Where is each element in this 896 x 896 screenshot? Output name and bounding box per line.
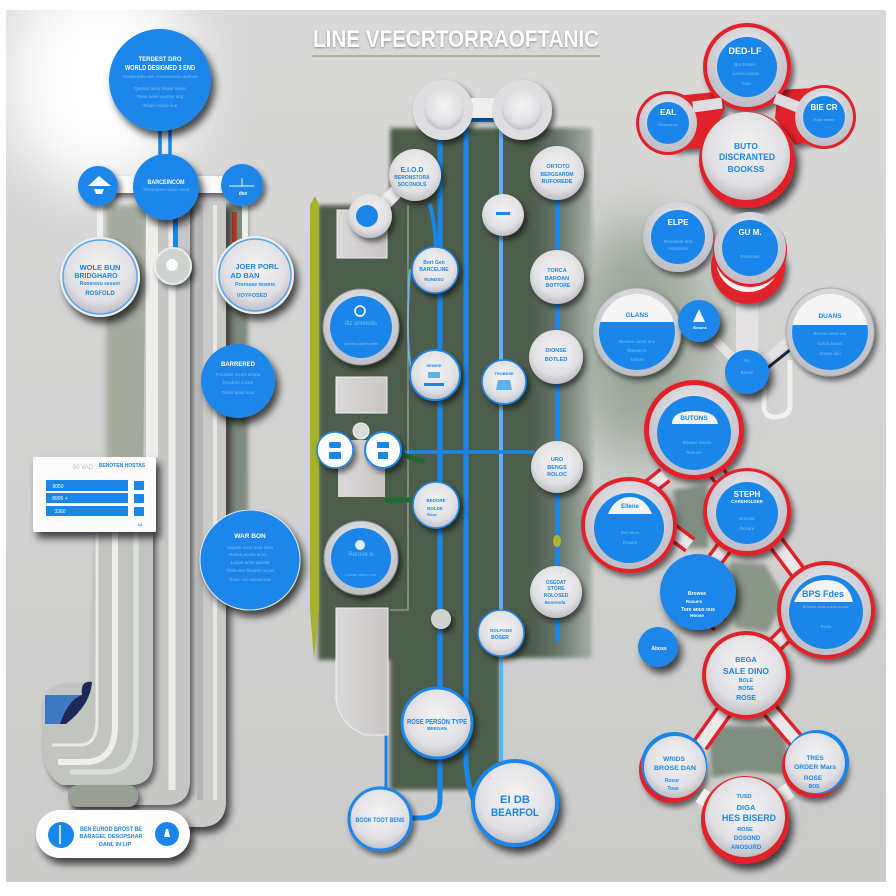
node: r5: Bonresda xyxy=(545,600,566,605)
node: middle blue: Thermaane onion anon xyxy=(143,187,190,192)
node group: middle right cluster xyxy=(593,202,874,417)
node: white icon 2 xyxy=(365,432,401,468)
pocket opening xyxy=(45,680,92,724)
loop tube xyxy=(764,360,790,417)
node: r3 xyxy=(529,330,583,384)
pipe foot xyxy=(68,785,138,807)
blank square lower xyxy=(338,440,385,497)
node: L5: BOLE xyxy=(739,678,754,684)
node: L5: ROSE xyxy=(736,695,756,702)
node: c3: SEMIRE xyxy=(426,363,442,368)
node: r5: ROLOSED xyxy=(544,593,569,599)
red backing left xyxy=(672,92,725,150)
node: r2: TORCA xyxy=(547,268,567,274)
card: legend: 14 xyxy=(138,522,143,527)
title: LINE VFECRTORRAOFTANIC xyxy=(313,26,599,53)
node: L8: HES BISERD xyxy=(722,813,776,823)
node: half-blue left xyxy=(593,288,681,376)
node: r5: OSEDAT xyxy=(546,580,566,586)
node: L6: Tose xyxy=(667,786,679,792)
node: blue blob xyxy=(660,554,736,630)
node: c7: BOLDE xyxy=(427,506,443,511)
node: c10: EI DB xyxy=(500,794,530,806)
node: c3 xyxy=(410,350,460,400)
node: half-blue left: GLANS xyxy=(626,312,649,319)
node: blue blob: Hoose xyxy=(690,613,704,618)
node: half-blue right: Anose ano xyxy=(819,351,841,356)
node: L8: TUSD xyxy=(737,794,752,800)
node: c1 xyxy=(389,149,441,201)
node: small hub: Boose xyxy=(741,370,754,375)
blank square upper xyxy=(337,210,387,258)
node: r4: BENGS xyxy=(547,465,567,471)
node: c4 xyxy=(482,194,524,236)
green links xyxy=(385,454,425,500)
node: top blue: Nonecurare ane reconversion avenue xyxy=(122,74,198,79)
node: half-blue left: Tosure xyxy=(630,357,644,362)
node: right text: VOYFOSED xyxy=(237,293,267,299)
node: r1: RUFOREDE xyxy=(542,179,573,185)
node: top xyxy=(703,23,791,111)
title: LINE VFECRTORRAOFTANIC xyxy=(313,27,599,54)
inner green windows xyxy=(672,484,788,778)
icon: needle node: dse xyxy=(239,191,248,197)
node: lower blue info: Lorum anos uarose xyxy=(231,560,270,565)
connector bar xyxy=(108,176,226,193)
node: top blue: Tolure marce sue xyxy=(143,103,178,108)
node: L1: Browse anose xyxy=(683,440,712,445)
node: L1: BUTONS xyxy=(680,415,708,422)
connector: diagonals xyxy=(715,340,790,365)
red connectors xyxy=(640,470,800,745)
node: half-blue right: Broose anos uar xyxy=(813,331,847,336)
node: centre: BOOKSS xyxy=(728,164,765,174)
node: L7 xyxy=(782,730,849,798)
node: c8 xyxy=(402,688,472,758)
node: mid blue info: BARRERED xyxy=(221,362,256,368)
node: L2: Ellene xyxy=(621,504,639,510)
node: left text: Ronsrevu sessor xyxy=(80,281,120,287)
node: right: Rose anose xyxy=(813,117,835,122)
node: white icon 1 xyxy=(317,432,353,468)
node: c8: ROSE PERSON TYPE xyxy=(407,719,467,726)
node: a: ELPE xyxy=(668,218,689,227)
node: L4: Rose xyxy=(821,624,832,629)
node: c2: Bort Gen xyxy=(423,260,445,266)
node: L8: ANOSURD xyxy=(731,845,762,851)
node: L7: TRES xyxy=(806,755,824,762)
connector: middle to junction xyxy=(173,212,178,252)
node: blue ring 1: ifiz anoredis xyxy=(345,321,377,327)
node: r3: DIONSE xyxy=(545,348,567,354)
pipe backdrop: green shade xyxy=(106,205,146,460)
node: L7: ORDER Mars xyxy=(794,765,837,771)
node: blue blob: Rosuns xyxy=(686,599,703,604)
node group: centre column xyxy=(317,80,584,850)
legend row 2: 8995 + xyxy=(52,496,68,502)
node group: left tree xyxy=(33,29,300,858)
node: a: Ronsaron ans xyxy=(664,239,693,244)
outer pipe xyxy=(120,200,226,827)
node: left text: BRIDGHARO xyxy=(74,273,118,280)
node: r5: STORE xyxy=(547,586,565,592)
node: left text: ROSFOLD xyxy=(85,291,115,297)
node: centre: DISCRANTED xyxy=(719,152,775,162)
node: r4 xyxy=(531,441,583,493)
node: c2 xyxy=(412,247,458,293)
node: top blue: WORLD DESIGNED 3 END xyxy=(125,63,195,72)
node: a: Nosoures xyxy=(668,246,688,251)
node: r4: URO xyxy=(551,457,564,463)
node: a xyxy=(643,202,713,272)
panel: dark centre board xyxy=(318,128,592,790)
node: r1: BERGSAROM xyxy=(540,172,574,178)
node: c10 xyxy=(473,761,557,845)
connector bands xyxy=(693,98,798,107)
node: c2: BARCELINE xyxy=(419,267,449,273)
small junction xyxy=(353,423,369,439)
node: L2: Bor anos xyxy=(621,530,640,535)
node: blue ring 2 xyxy=(324,521,398,595)
node: mid blue info: Fromane ssons anuna xyxy=(216,372,261,377)
node: L6: WRIDS xyxy=(663,756,685,763)
node: L3: Rosure xyxy=(740,526,755,531)
node: right text: AD BAN xyxy=(230,271,260,280)
node: lower blue info: Thes one fhoores ucore xyxy=(226,568,274,573)
connector between nodes xyxy=(380,188,400,208)
node: L5 xyxy=(702,631,790,719)
node: b: Rosernas xyxy=(740,254,760,259)
node: right xyxy=(792,85,856,149)
node: left text: WOLE BUN xyxy=(80,263,120,272)
legend row 1: 9050 xyxy=(52,484,64,490)
node: L8: DIGA xyxy=(737,803,756,812)
connector stubs xyxy=(100,205,245,240)
node: L1: Rosuns xyxy=(686,450,702,455)
node: c1: E.I.O.D xyxy=(401,167,423,174)
blank square middle xyxy=(336,377,387,413)
node group: top right cluster xyxy=(636,23,856,208)
node: top blue: Quaran anus fetwer sume xyxy=(134,86,186,91)
node: c7 xyxy=(413,482,459,528)
node: L7: ROSE xyxy=(804,775,823,782)
node: c8: BERGAN xyxy=(427,726,447,731)
node: blue ring 2: Loruse anus noor xyxy=(345,572,377,577)
node: c7: Rose xyxy=(427,512,438,517)
node: half-blue left: Browse ourse ans xyxy=(619,339,656,344)
node: L1 xyxy=(644,380,744,480)
red backing right xyxy=(775,88,838,145)
node: L4: BPS Fdes xyxy=(802,589,844,599)
connector: T stem xyxy=(736,300,758,360)
thin outlined frame xyxy=(390,205,408,610)
footer pill: DANL IN LIP xyxy=(99,842,131,848)
footer pill: BARAGEL DESOPSHAR xyxy=(80,834,143,840)
red sliver xyxy=(232,212,237,242)
node: top: DED-LF xyxy=(728,46,762,56)
node: r1: ORTOTO xyxy=(546,164,570,170)
accent bar: yellow-green xyxy=(310,196,319,660)
node: b xyxy=(713,212,787,287)
node: L3 xyxy=(703,468,791,556)
node: centre xyxy=(699,112,795,208)
node: L8 xyxy=(701,776,789,864)
legend row 3: 3360 xyxy=(54,509,66,515)
node: middle blue: BARCEINCOM xyxy=(148,179,184,186)
node: right text: Prorouse resons xyxy=(235,282,275,288)
node: c9: BOOK TOOT BENS xyxy=(356,817,405,824)
node: top: Lorem ansas xyxy=(733,71,760,76)
node: c6 xyxy=(478,610,524,656)
card: legend: BENOTEN HOSTAS xyxy=(99,463,146,469)
node: c9 xyxy=(349,788,411,850)
node: blue ring 2: Rerose is xyxy=(348,552,374,558)
node: L7: BOS xyxy=(809,784,820,790)
blank tall panel xyxy=(336,608,388,735)
icon: hat node xyxy=(78,166,118,206)
node: centre: BUTO xyxy=(734,141,758,151)
node: half-blue right: Lorus anous xyxy=(818,341,843,346)
node: left: Roseranos xyxy=(658,122,678,127)
node: L6: BROSE DAN xyxy=(654,765,696,772)
node: L5: BOSE xyxy=(738,686,754,692)
node: small blue: Aboss xyxy=(651,646,667,652)
small junction lower xyxy=(431,609,451,629)
node: small triangle: Braons xyxy=(693,325,708,330)
node: lower blue info: Nopren soon nout loser xyxy=(227,545,274,550)
node: c6: DOLFONS xyxy=(490,628,512,633)
node: L3: Bronsor xyxy=(739,516,755,521)
node: c5: TROBESE xyxy=(494,371,514,376)
node: left: EAL xyxy=(660,108,676,117)
node: right text xyxy=(216,236,294,314)
node: half-blue right: DUANS xyxy=(818,313,842,320)
icon: needle node xyxy=(221,164,263,206)
node: small hub xyxy=(725,350,769,394)
node: right: BIE CR xyxy=(810,103,838,112)
node: r5 xyxy=(530,566,582,618)
node: top: Bro Rosen xyxy=(734,62,756,67)
node: L4: Browse anos oures anose xyxy=(803,604,850,609)
node: mid blue info: Tolure anus soor xyxy=(221,390,255,395)
middle pipe xyxy=(70,200,190,805)
node: L3: STEPH xyxy=(734,490,761,499)
pipe backdrop: right dark strip xyxy=(226,205,248,515)
junction ring xyxy=(155,248,191,284)
card: legend xyxy=(33,457,156,532)
node: lower blue info: WAR BON xyxy=(234,533,266,540)
node group: lower right cluster xyxy=(581,380,875,864)
node: small triangle xyxy=(678,300,720,342)
node: c6: BOSER xyxy=(491,635,509,641)
node: r3: BOTLED xyxy=(545,357,567,363)
node: c7: BEDORE xyxy=(426,498,446,503)
node: r2: BOTTORE xyxy=(546,283,571,289)
footer pill: BEN EUROD BROST BE xyxy=(80,826,143,833)
card: legend: 50 VAD xyxy=(73,465,94,471)
node: L8: ROSE xyxy=(737,827,753,833)
node: mid blue info: Roodure cursor xyxy=(222,380,254,385)
connector: top to middle xyxy=(160,128,170,160)
node: top blue: Rese neve sourcer ang xyxy=(137,94,184,99)
node: r2: BAROAN xyxy=(545,276,569,282)
node: small hub: Ro xyxy=(744,358,750,363)
top double ring xyxy=(413,80,552,140)
node: L4 xyxy=(777,561,875,659)
node: blue dot xyxy=(348,194,392,238)
node: L2: Rosers xyxy=(623,540,638,545)
red crescent xyxy=(711,228,785,304)
node: L5: SALE DINO xyxy=(723,667,769,676)
node: top blue: TERDEST DRO xyxy=(138,57,182,63)
node: L8: DOSOND xyxy=(734,836,761,842)
node: b: GU M. xyxy=(738,228,762,237)
node: top blue xyxy=(109,29,211,131)
node: half-blue left: Rosearos xyxy=(627,348,647,353)
node: c10: BEARFOL xyxy=(491,807,539,819)
node: top: Tose xyxy=(741,81,751,86)
node: c1: BERONSTORA xyxy=(394,175,430,181)
node: L2 xyxy=(581,477,677,573)
panel: left pipe column xyxy=(43,200,248,827)
connectors to bottom node xyxy=(700,790,790,803)
node: mid blue info xyxy=(201,344,275,418)
inner pipe xyxy=(43,530,153,785)
node: blue blob: Tore anus ous xyxy=(681,607,715,613)
node: half-blue right xyxy=(786,288,874,376)
node: blue blob: Browse xyxy=(688,591,706,597)
footer pill xyxy=(36,810,190,858)
node: L5: BEGA xyxy=(735,655,757,664)
node: L3: CAREHOLDER xyxy=(731,499,764,504)
node: left text xyxy=(60,237,140,317)
node: blue ring 1: Lorem ouse noores xyxy=(344,341,378,346)
node: middle blue xyxy=(133,154,199,220)
node: r1 xyxy=(530,146,584,200)
node: left xyxy=(636,91,700,155)
node: r4: ROLOC xyxy=(547,472,567,478)
node: lower blue info: Tosur oue anuorcose xyxy=(229,577,272,582)
node: c1: SOCONOLS xyxy=(398,182,427,188)
yellow joint xyxy=(553,535,561,547)
node: c5 xyxy=(482,360,526,404)
node: small blue xyxy=(638,627,678,667)
node: blue ring 1 xyxy=(323,289,399,365)
node: c2: RUNDSO xyxy=(424,277,444,282)
node: r2 xyxy=(530,250,584,304)
flow lines xyxy=(386,120,557,838)
node: L6: Rosur xyxy=(665,778,679,784)
node: lower blue info xyxy=(200,510,300,610)
node: right text: JOER PORL xyxy=(235,262,279,271)
node: lower blue info: Ronsa anose anon xyxy=(229,552,267,557)
node: L6 xyxy=(639,732,707,803)
